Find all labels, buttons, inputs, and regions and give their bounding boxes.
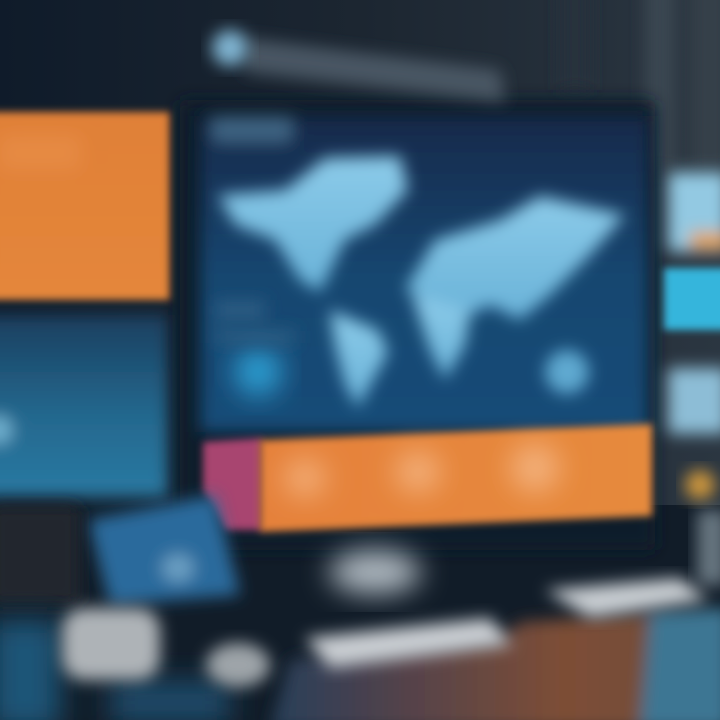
screen side text blocks [215, 300, 295, 344]
title bar [245, 38, 505, 102]
bottom-left blue glow [0, 620, 230, 720]
map: north america [218, 156, 408, 292]
monitor stand [329, 550, 421, 594]
monitor screen [200, 116, 648, 432]
orange bar with icons [260, 424, 652, 532]
map: eurasia [405, 196, 625, 320]
keyboard [305, 618, 512, 668]
pink block [203, 438, 262, 530]
world map [218, 156, 625, 408]
panel: right pale card [668, 172, 720, 252]
panel: left orange card [0, 112, 170, 300]
panel: right pale lower card [668, 368, 720, 434]
monitor frame [180, 100, 655, 550]
icon: small orange dot [685, 470, 715, 500]
map marker: blue glow [234, 348, 282, 396]
white cup [62, 608, 160, 680]
dark box [0, 505, 80, 605]
object: white pad on desk [545, 578, 708, 618]
map: africa [412, 295, 470, 380]
top header: circle and title bar [212, 30, 505, 102]
blue credit card [88, 495, 240, 605]
white mouse [206, 643, 270, 687]
map: australia [545, 350, 589, 394]
panel: right cyan card [664, 268, 720, 330]
map: south america [330, 310, 388, 408]
desk surface [270, 608, 720, 720]
panel: left blue card [0, 315, 168, 497]
object: right gray stand [697, 510, 720, 585]
header circle [212, 30, 248, 66]
icon: bar spots [285, 444, 559, 496]
